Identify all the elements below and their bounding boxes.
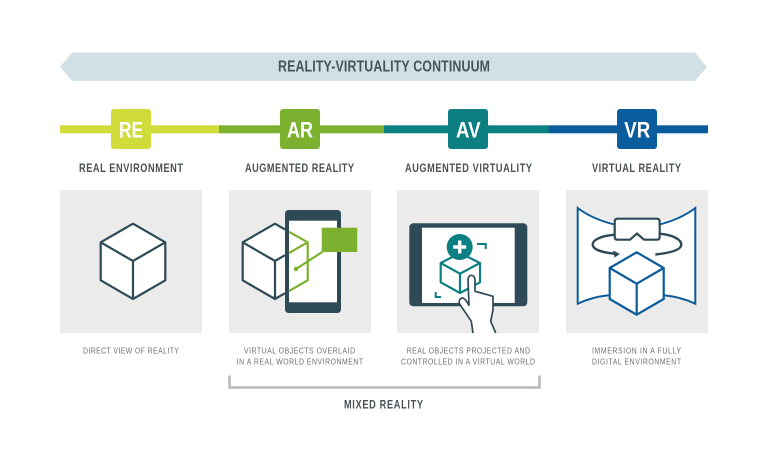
panel: real environment — [60, 190, 202, 333]
icon: frame corners — [436, 244, 486, 297]
badge: VR: VR — [624, 117, 650, 142]
description: augmented reality: VIRTUAL OBJECTS OVERLAID — [244, 346, 355, 356]
description: augmented virtuality: REAL OBJECTS PROJECTED AND — [407, 346, 530, 356]
description: augmented virtuality — [401, 346, 535, 367]
timeline bar — [60, 125, 708, 133]
icon: cube partly seen through phone — [243, 224, 308, 299]
description: virtual reality: DIGITAL ENVIRONMENT — [592, 357, 681, 367]
icon: blue cube — [610, 252, 664, 315]
description: augmented reality: IN A REAL WORLD ENVIRONMENT — [237, 357, 363, 367]
icon: teal cube — [441, 253, 480, 293]
label: mixed reality: MIXED REALITY — [344, 400, 423, 412]
icon: smartphone — [285, 210, 341, 313]
badge: AV — [448, 109, 488, 149]
badge: VR — [617, 109, 657, 149]
panel: augmented reality — [229, 190, 371, 333]
description: augmented reality — [237, 346, 363, 367]
banner arrow: continuum — [60, 52, 707, 81]
icon: tablet — [409, 223, 527, 306]
heading: augmented virtuality: AUGMENTED VIRTUALITY — [405, 163, 532, 175]
panel: virtual reality — [566, 190, 708, 333]
icon: pointing hand — [459, 275, 496, 333]
description: augmented virtuality: CONTROLLED IN A VIRTUAL WORLD — [401, 357, 535, 367]
heading: virtual reality: VIRTUAL REALITY — [592, 163, 681, 175]
icon: rotation arrows — [593, 234, 681, 258]
badge: AV: AV — [456, 117, 481, 142]
icon: VR goggles — [615, 219, 660, 240]
icon: curved screen — [578, 208, 695, 304]
badge: AR — [280, 109, 320, 149]
description: virtual reality: IMMERSION IN A FULLY — [592, 346, 682, 356]
icon: green label with pointer — [294, 228, 357, 271]
heading: real environment: REAL ENVIRONMENT — [79, 163, 184, 175]
bracket: mixed reality — [230, 376, 540, 388]
title: REALITY-VIRTUALITY CONTINUUM — [278, 57, 490, 75]
description: virtual reality — [592, 346, 682, 367]
description: real environment: DIRECT VIEW OF REALITY — [83, 346, 180, 356]
icon: cube — [101, 224, 165, 299]
icon: plus circle — [447, 234, 473, 260]
heading: augmented reality: AUGMENTED REALITY — [245, 163, 354, 175]
badge: RE — [111, 109, 151, 149]
badge: AR: AR — [287, 117, 313, 142]
hand outline — [459, 275, 496, 333]
badge: RE: RE — [119, 117, 143, 142]
panel: augmented virtuality — [397, 190, 539, 333]
